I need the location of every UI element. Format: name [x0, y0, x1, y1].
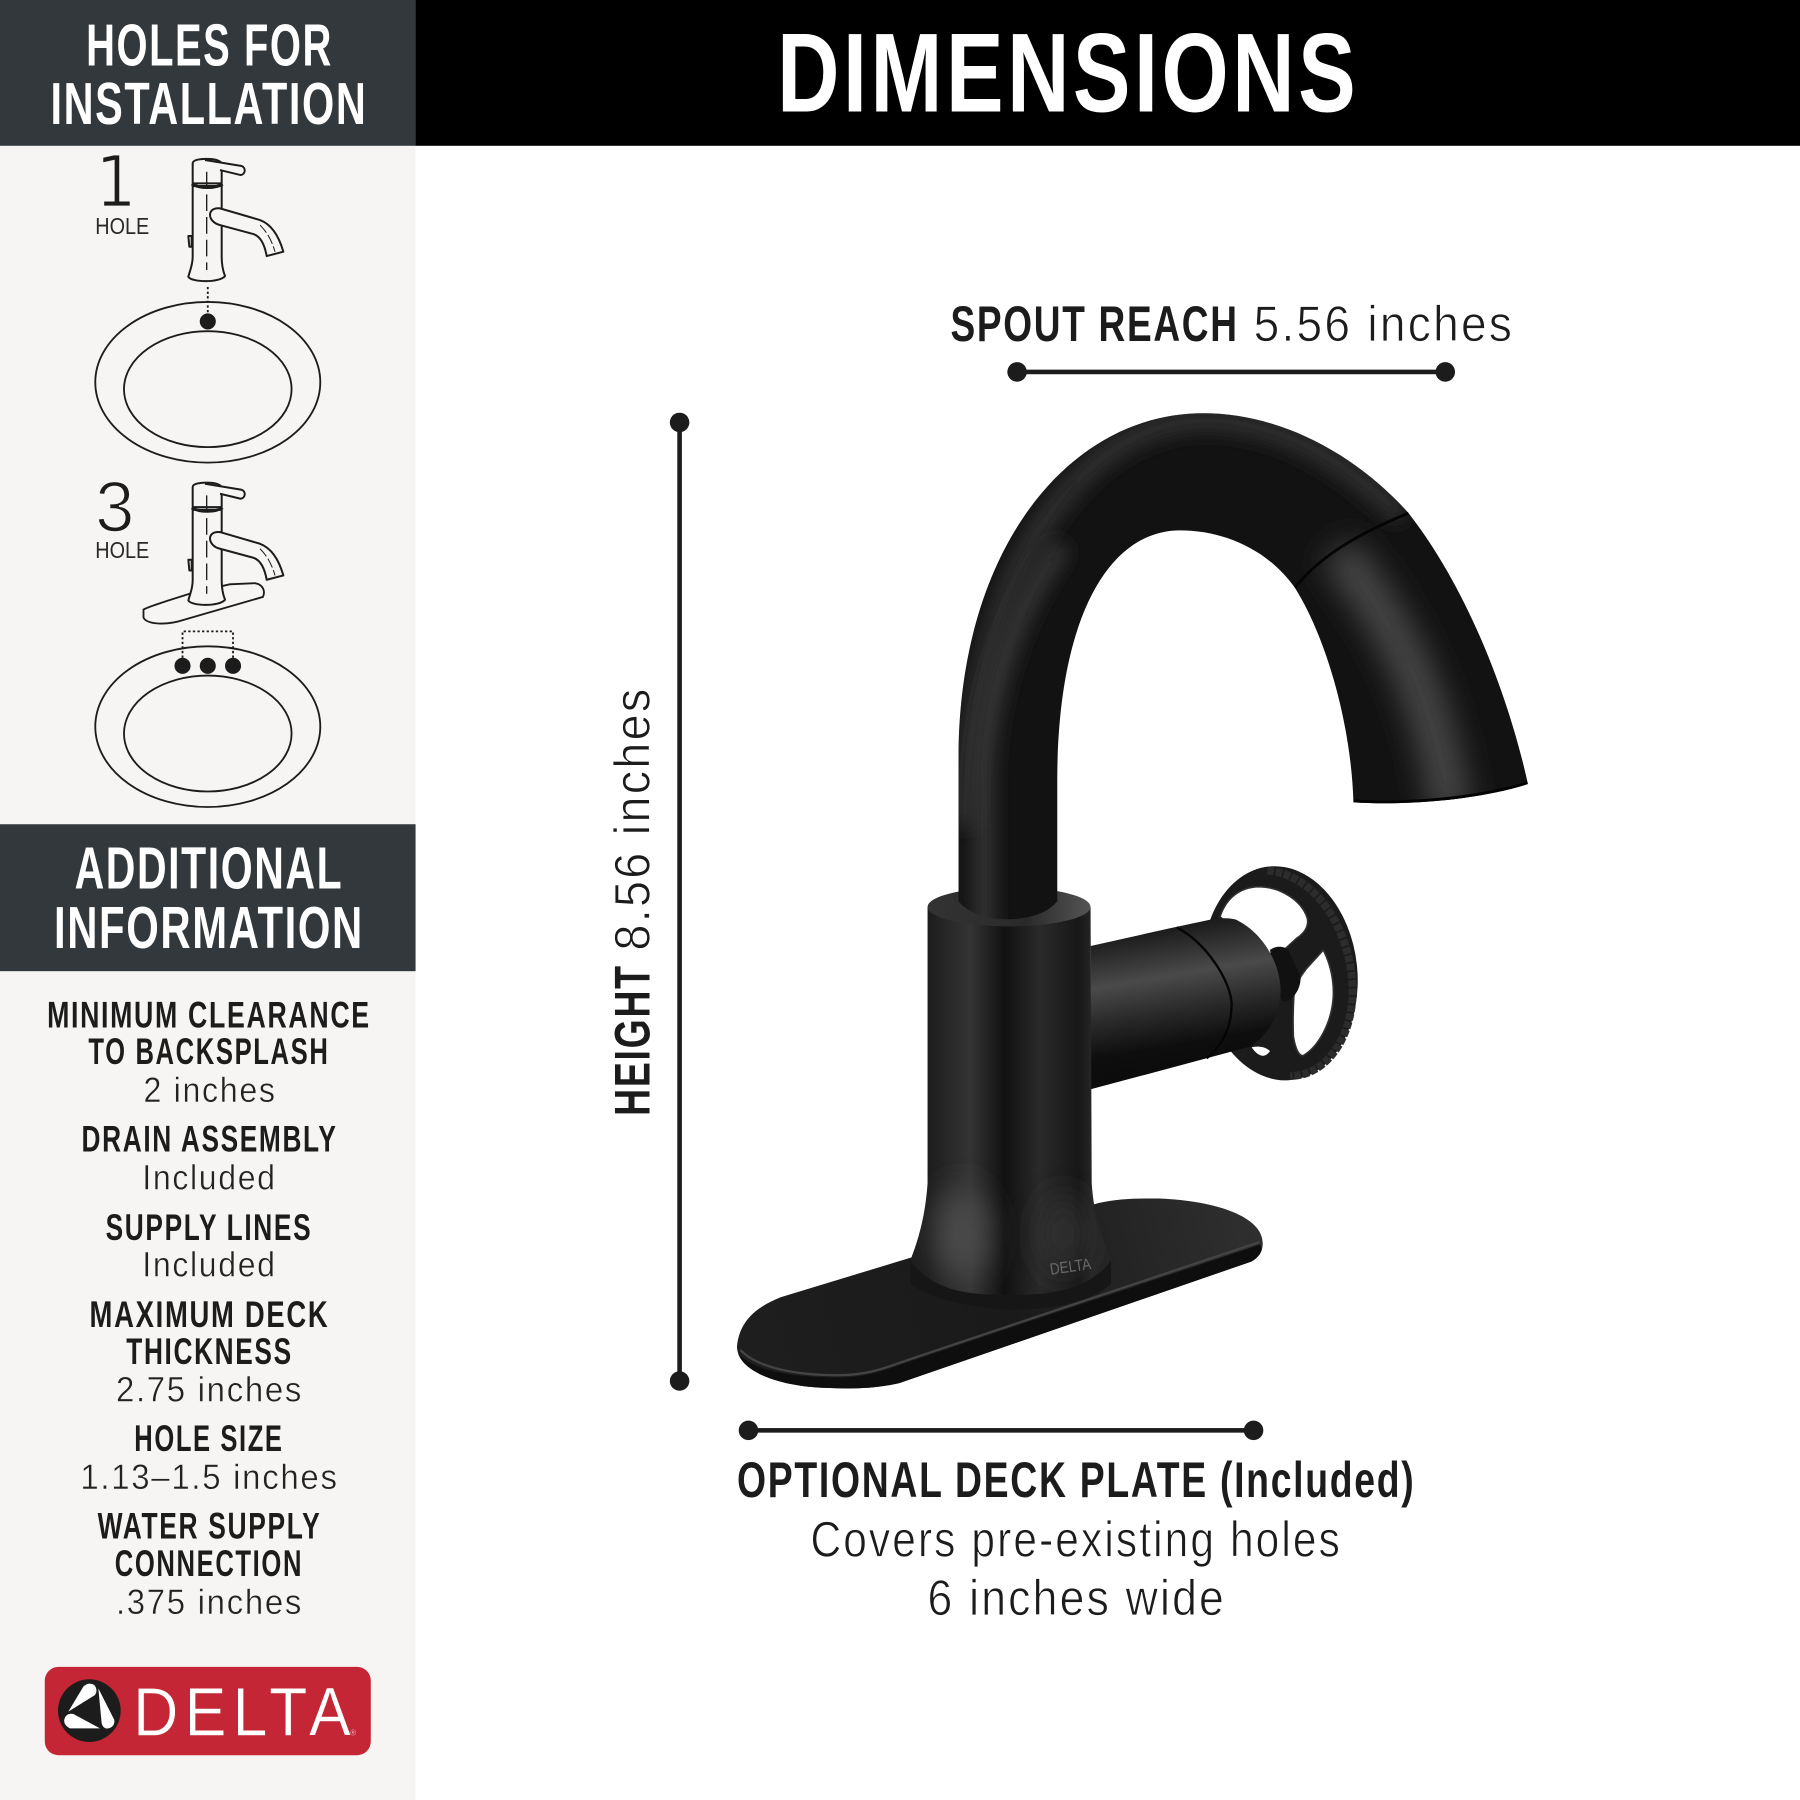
- spout reach measurement: SPOUT REACH: [951, 295, 1239, 352]
- info block: water supply connection: WATER SUPPLY: [98, 1505, 321, 1546]
- info block: maximum deck thickness: MAXIMUM DECK: [90, 1294, 329, 1335]
- info block: drain assembly: [82, 1118, 338, 1197]
- icon: faucet on deck plate: [188, 483, 283, 605]
- info block: hole size: [80, 1418, 339, 1497]
- header: holes for installation: INSTALLATION: [51, 70, 367, 137]
- left sidebar panel: [0, 0, 416, 1800]
- spout reach measurement: [951, 295, 1514, 382]
- title banner: dimensions: [416, 0, 1800, 146]
- title banner: dimensions: DIMENSIONS: [777, 9, 1359, 135]
- info block: drain assembly: Included: [142, 1157, 277, 1197]
- info block: water supply connection: CONNECTION: [115, 1543, 303, 1584]
- deck plate: [735, 1198, 1267, 1395]
- icon: delta mark: [58, 1679, 121, 1742]
- dimension line: deck plate: [739, 1421, 1263, 1440]
- info block: maximum deck thickness: THICKNESS: [126, 1331, 293, 1372]
- number label: 1 hole: HOLE: [95, 213, 149, 239]
- connector: dotted line to hole: [207, 287, 209, 312]
- logo: delta: [45, 1667, 371, 1755]
- icon: faucet line drawing: [188, 159, 283, 281]
- deck plate measurement: Covers pre-existing holes: [810, 1511, 1342, 1568]
- icon: sink basin with one hole: [95, 302, 320, 463]
- info block: minimum clearance: TO BACKSPLASH: [88, 1031, 329, 1072]
- logo: delta: DELTA: [133, 1674, 357, 1751]
- height measurement: HEIGHT: [604, 964, 661, 1116]
- header: holes for installation: HOLES FOR: [86, 11, 333, 78]
- info block: minimum clearance: 2 inches: [143, 1070, 277, 1110]
- info block: supply lines: SUPPLY LINES: [106, 1207, 312, 1248]
- connector: dotted bracket to holes: [183, 631, 233, 658]
- dimension line: height: [670, 413, 689, 1391]
- height measurement: 8.56 inches: [604, 686, 661, 951]
- one hole installation diagram: [95, 141, 320, 463]
- info block: maximum deck thickness: 2.75 inches: [116, 1370, 303, 1410]
- header: additional information: [0, 824, 416, 971]
- icon: sink basin with three holes: [95, 646, 320, 807]
- dimension line: spout reach: [1007, 362, 1455, 382]
- info block: minimum clearance: MINIMUM CLEARANCE: [47, 994, 371, 1035]
- info block: drain assembly: DRAIN ASSEMBLY: [82, 1118, 338, 1159]
- deck plate measurement: [737, 1421, 1415, 1626]
- icon: deck plate line drawing: [143, 583, 264, 624]
- info block: hole size: HOLE SIZE: [134, 1418, 284, 1459]
- handle wheel and arm: [1091, 858, 1368, 1089]
- info block: supply lines: [106, 1207, 312, 1285]
- deck plate measurement: OPTIONAL DECK PLATE (Included): [737, 1451, 1415, 1508]
- info block: minimum clearance: [47, 994, 371, 1110]
- header: additional information: INFORMATION: [54, 894, 364, 961]
- header: holes for installation: [0, 0, 416, 146]
- faucet body: [910, 887, 1111, 1314]
- handle arm: [1091, 918, 1281, 1089]
- number label: 3 hole: [95, 469, 149, 563]
- number label: 1 hole: 1: [95, 141, 137, 224]
- three hole installation diagram: [95, 469, 320, 807]
- spout reach measurement: 5.56 inches: [1254, 295, 1514, 352]
- info block: supply lines: Included: [142, 1245, 277, 1285]
- handle wheel: [1192, 858, 1368, 1088]
- height measurement: [604, 413, 689, 1391]
- logo: delta: ®: [350, 1729, 356, 1738]
- brand mark on base: DELTA: [1049, 1255, 1092, 1279]
- number label: 3 hole: HOLE: [95, 537, 149, 563]
- deck plate measurement: 6 inches wide: [928, 1569, 1226, 1626]
- header: additional information: ADDITIONAL: [75, 835, 343, 902]
- faucet product illustration: [735, 413, 1528, 1395]
- info block: hole size: 1.13–1.5 inches: [80, 1457, 339, 1497]
- info block: maximum deck thickness: [90, 1294, 329, 1410]
- gooseneck spout: [959, 413, 1528, 930]
- info block: water supply connection: [98, 1505, 321, 1622]
- number label: 3 hole: 3: [95, 469, 134, 548]
- info block: water supply connection: .375 inches: [116, 1582, 303, 1622]
